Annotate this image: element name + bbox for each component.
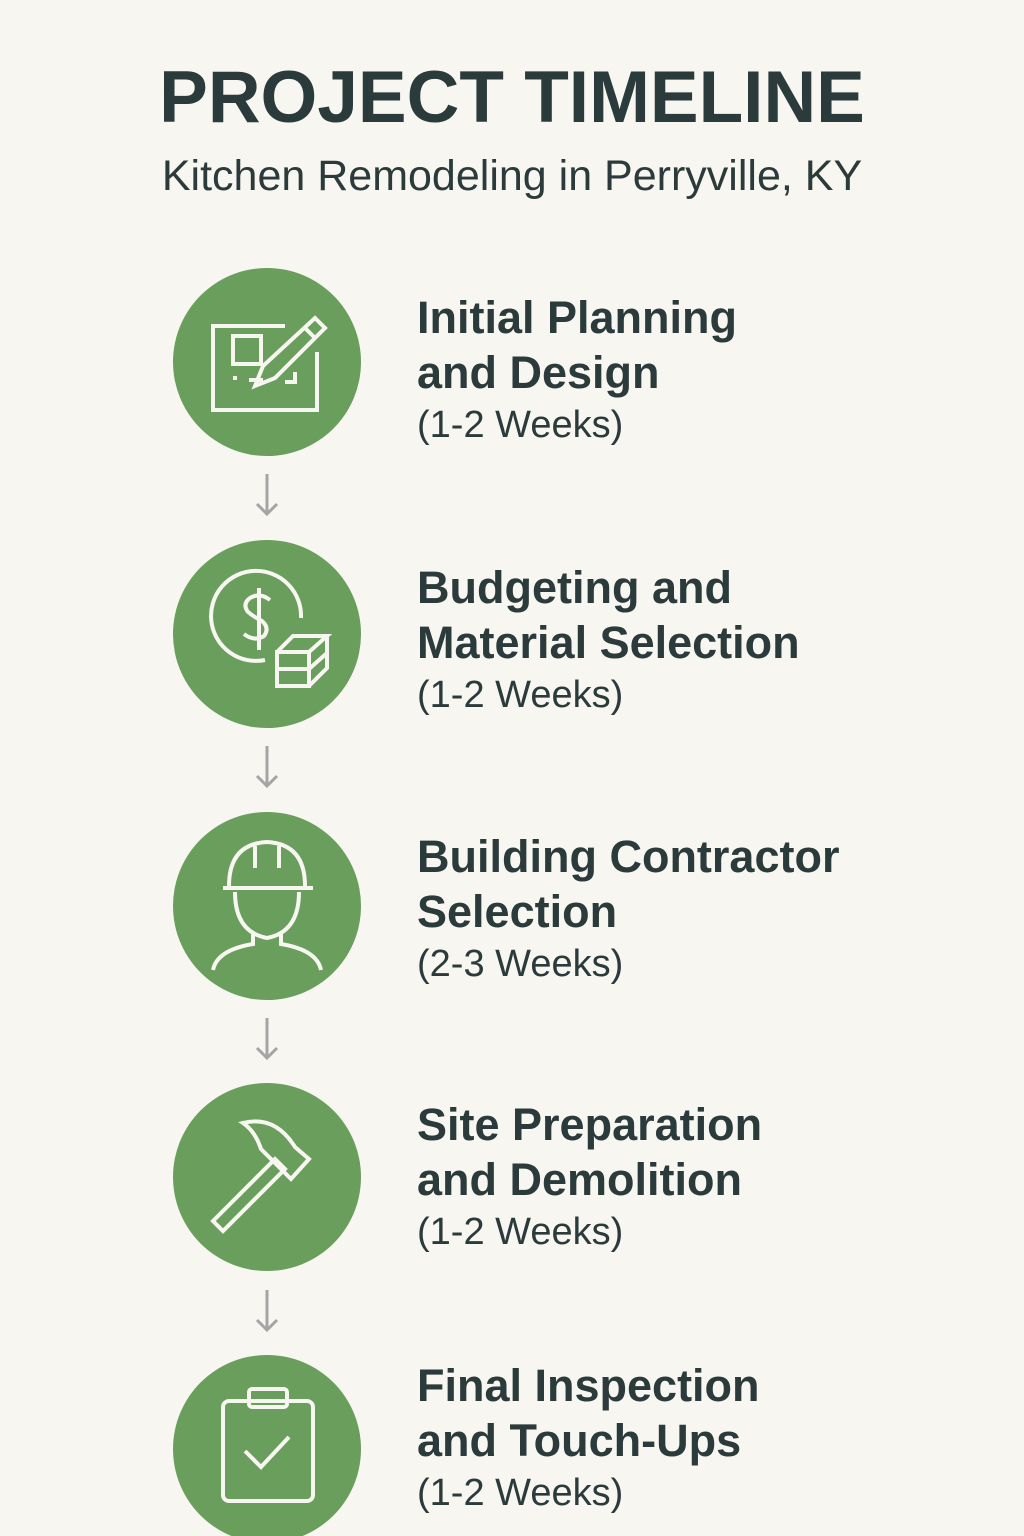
step 5 text: Final Inspection	[417, 1360, 760, 1411]
step 4 text: (1-2 Weeks)	[417, 1211, 623, 1253]
step 3 text: (2-3 Weeks)	[417, 943, 623, 985]
step 3 text: Building Contractor	[417, 831, 839, 882]
step 1 text: (1-2 Weeks)	[417, 404, 623, 446]
title: PROJECT TIMELINE	[159, 57, 865, 138]
step 4 text: and Demolition	[417, 1154, 742, 1205]
step 5 text: and Touch-Ups	[417, 1415, 741, 1466]
step 2 text: (1-2 Weeks)	[417, 674, 623, 716]
icon: hammer	[173, 1083, 361, 1271]
icon: clipboard	[173, 1355, 361, 1536]
icon: planning	[173, 268, 361, 456]
icon: contractor	[173, 812, 361, 1000]
step 2 text	[417, 562, 800, 716]
arrow 4	[256, 1290, 278, 1332]
step 1 text	[417, 292, 737, 446]
step 4 text	[417, 1099, 762, 1253]
step 2 text: Material Selection	[417, 617, 800, 668]
step 3 text: Selection	[417, 886, 617, 937]
arrow 3	[256, 1018, 278, 1060]
step 5 text: (1-2 Weeks)	[417, 1472, 623, 1514]
icon: budget	[173, 540, 361, 728]
subtitle: Kitchen Remodeling in Perryville, KY	[162, 152, 862, 200]
step 1 text: and Design	[417, 347, 660, 398]
step 4 text: Site Preparation	[417, 1099, 762, 1150]
step 3 text	[417, 831, 839, 985]
step 1 text: Initial Planning	[417, 292, 737, 343]
step 5 text	[417, 1360, 760, 1514]
arrow 2	[256, 746, 278, 788]
arrow 1	[256, 474, 278, 516]
step 2 text: Budgeting and	[417, 562, 732, 613]
